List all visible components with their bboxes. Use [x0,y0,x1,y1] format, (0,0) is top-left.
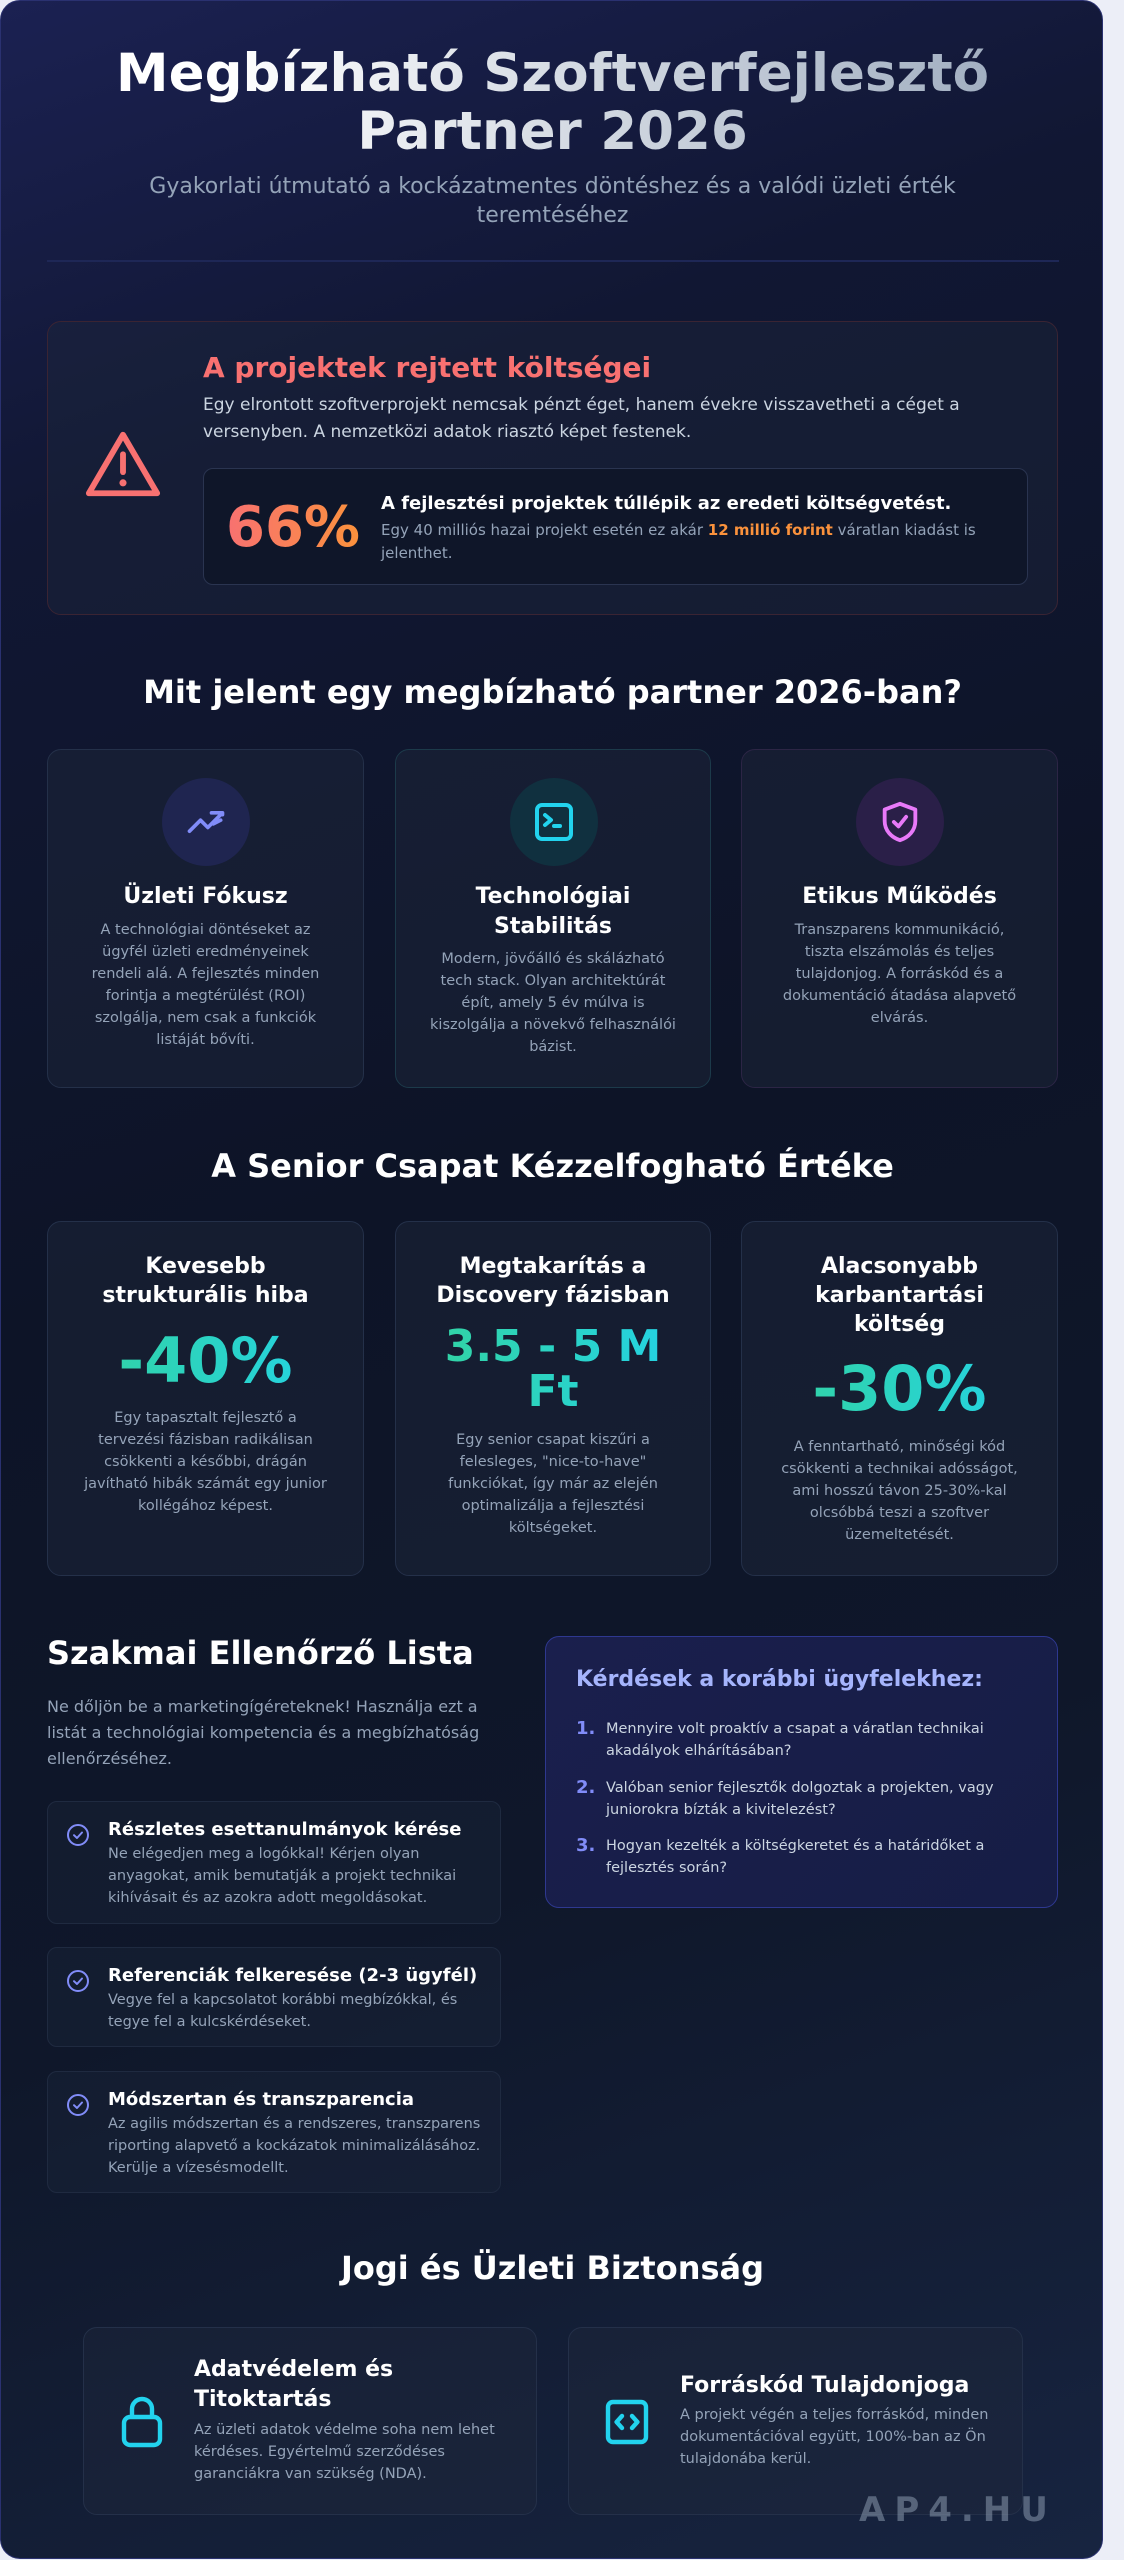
card: ethics: tulajdonjog. A forráskód és a [796,966,1003,982]
card: business focus: rendeli alá. A fejlesztés minden [92,966,319,982]
panel: questions: 1. [576,1718,595,1739]
heading: checklist: Szakmai Ellenőrző Lista [47,1634,474,1672]
stat text: jelenthet. [381,544,453,562]
stat -40% [48,1327,363,1395]
card: discovery savings [395,1221,711,1576]
card: fewer errors: strukturális hiba [102,1283,309,1308]
title: Partner 2026 [357,101,748,162]
checklist item 2 [47,1947,501,2047]
panel: questions: juniorokra bízták a kivitelezést? [606,1802,836,1818]
stat text [380,521,976,562]
stat 3.5-5M Ft [396,1324,710,1414]
card: fewer errors: Egy tapasztalt fejlesztő a [114,1410,297,1426]
stat 3.5-5M Ft: 3.5 - 5 M [445,1321,661,1372]
card: discovery savings: felesleges, "nice-to-have" [460,1454,646,1470]
checklist item 1: anyagokat, amik bemutatják a projekt technikai [108,1868,456,1884]
panel: questions [545,1636,1058,1908]
checklist item 3: riporting alapvető a kockázatok minimalizálásához. [108,2138,480,2154]
panel: questions: Kérdések a korábbi ügyfelekhez: [576,1667,983,1692]
card: ethics: dokumentáció átadása alapvető [783,988,1016,1004]
panel: questions: akadályok elhárításában? [606,1743,792,1759]
card: tech stability [395,749,711,1088]
checklist item 2: Vegye fel a kapcsolatot korábbi megbízókkal, és [108,1992,457,2008]
text: Egy elrontott szoftverprojekt nemcsak pénzt éget, hanem évekre visszavetheti a céget a [203,395,960,415]
card: maintenance: költség [854,1312,945,1337]
card: fewer errors: csökkenti a későbbi, drágán [104,1454,307,1470]
panel: questions: Mennyire volt proaktív a csapat a váratlan technikai [606,1721,984,1737]
card: tech stability: Technológiai [476,884,630,909]
checklist item 2: tegye fel a kulcskérdéseket. [108,2014,311,2030]
checklist item 1: Ne elégedjen meg a logókkal! Kérjen olyan [108,1846,420,1862]
panel: questions: fejlesztés során? [606,1860,727,1876]
icon: lock [122,2396,162,2448]
card: source code: dokumentációval együtt, 100%-ban az Ön [680,2429,986,2445]
card: discovery savings: költségeket. [509,1520,597,1536]
card: maintenance: karbantartási [815,1283,984,1308]
icon: terminal [510,778,598,866]
heading: A projektek rejtett költségei [203,351,651,384]
stat box [203,468,1028,585]
card: ethics: Etikus Működés [802,884,997,909]
panel: questions: Valóban senior fejlesztők dolgoztak a projekten, vagy [606,1780,994,1796]
text: versenyben. A nemzetközi adatok riasztó képet festenek. [203,422,691,442]
card: tech stability: kiszolgálja a növekvő felhasználói [430,1017,676,1033]
subtitle: teremtéséhez [477,203,628,228]
card: ethics [741,749,1058,1088]
card: tech stability: épít, amely 5 év múlva is [461,995,645,1011]
card: ethics: Transzparens kommunikáció, [795,922,1004,938]
card: business focus: forintja a megtérülést (ROI) [106,988,305,1004]
card: ethics: elvárás. [871,1010,928,1026]
heading: partner 2026: Mit jelent egy megbízható partner 2026-ban? [143,673,962,711]
card: fewer errors: javítható hibák számát egy junior [84,1476,327,1492]
card: discovery savings: funkciókat, így már az elején [448,1476,658,1492]
card: maintenance: ami hosszú távon 25-30%-kal [792,1483,1007,1499]
checklist item 3: Az agilis módszertan és a rendszeres, transzparens [108,2116,480,2132]
card: discovery savings: optimalizálja a fejlesztési [462,1498,644,1514]
checklist intro: listát a technológiai kompetencia és a megbízhatóság [47,1723,479,1742]
card: maintenance [741,1221,1058,1576]
card: source code [568,2327,1023,2515]
card: maintenance: olcsóbbá teszi a szoftver [810,1505,989,1521]
title: Megbízható Szoftverfejlesztő [116,43,989,104]
checklist item 1 [47,1801,501,1924]
card: tech stability: bázist. [529,1039,577,1055]
checklist intro: ellenőrzéséhez. [47,1749,172,1768]
card: fewer errors: tervezési fázisban radikálisan [98,1432,313,1448]
stat -30%: -30% [812,1352,987,1425]
card: maintenance: A fenntartható, minőségi kód [794,1439,1005,1455]
icon: shield [856,778,944,866]
card: business focus [47,749,364,1088]
checklist intro [47,1697,479,1768]
card: discovery savings: Discovery fázisban [436,1283,670,1308]
icon: warning [86,432,160,496]
card: maintenance: csökkenti a technikai adósságot, [781,1461,1018,1477]
panel: questions: 3. [576,1835,595,1856]
stat 3.5-5M Ft: Ft [527,1366,579,1417]
card: business focus: szolgálja, nem csak a funkciók [95,1010,316,1026]
card: discovery savings: Egy senior csapat kiszűri a [456,1432,650,1448]
heading: senior team value: A Senior Csapat Kézzelfogható Értéke [211,1147,894,1185]
card: data protection: Az üzleti adatok védelme soha nem lehet [194,2422,495,2438]
card: data protection [83,2327,537,2515]
checklist item 1: Részletes esettanulmányok kérése [108,1819,461,1840]
card: data protection: Titoktartás [194,2387,331,2412]
card: fewer errors: Kevesebb [145,1254,266,1279]
card: maintenance: üzemeltetését. [845,1527,954,1543]
card: business focus: ügyfél üzleti eredményeinek [102,944,309,960]
stat text: Egy 40 milliós hazai projekt esetén ez akár 12 millió forint váratlan kiadást is [381,521,976,539]
card: fewer errors: kollégához képest. [138,1498,273,1514]
card: maintenance: Alacsonyabb [821,1254,978,1279]
checklist intro: Ne dőljön be a marketingígéreteknek! Használja ezt a [47,1697,478,1716]
card: business focus: Üzleti Fókusz [123,884,288,909]
stat -40%: -40% [118,1324,293,1397]
heading: legal: Jogi és Üzleti Biztonság [341,2249,764,2287]
title [1,45,1104,161]
subtitle: Gyakorlati útmutató a kockázatmentes döntéshez és a valódi üzleti érték [149,174,956,199]
card: data protection: garanciákra van szükség (NDA). [194,2466,427,2482]
panel: hidden costs [47,321,1058,615]
icon: trend [162,778,250,866]
card: fewer errors [47,1221,364,1576]
card: tech stability: Stabilitás [494,914,612,939]
checklist item 3: Módszertan és transzparencia [108,2089,414,2110]
checklist item 2: Referenciák felkeresése (2-3 ügyfél) [108,1965,477,1986]
card: tech stability: tech stack. Olyan architektúrát [441,973,665,989]
subtitle [149,174,956,228]
card: data protection: Adatvédelem és [194,2357,393,2382]
card: data protection: kérdéses. Egyértelmű szerződéses [194,2444,445,2460]
stat number: 66% [226,495,360,560]
checklist item 3: Kerülje a vízesésmodellt. [108,2160,289,2176]
checklist item 1: kihívásait és az azokra adott megoldásokat. [108,1890,427,1906]
text [203,395,960,442]
panel: questions: Hogyan kezelték a költségkeretet és a határidőket a [606,1838,984,1854]
panel: questions: 2. [576,1777,595,1798]
stat heading: A fejlesztési projektek túllépik az eredeti költségvetést. [381,493,951,514]
card: tech stability: Modern, jövőálló és skálázható [441,951,665,967]
card: business focus: listáját bővíti. [156,1032,255,1048]
card: source code: Forráskód Tulajdonjoga [680,2373,969,2398]
icon: code [606,2400,648,2444]
card: ethics: tiszta elszámolás és teljes [805,944,994,960]
watermark: AP4.HU [859,2490,1057,2530]
card: source code: tulajdonába kerül. [680,2451,811,2467]
card: business focus: A technológiai döntéseket az [101,922,310,938]
card: source code: A projekt végén a teljes forráskód, minden [680,2407,988,2423]
card: discovery savings: Megtakarítás a [460,1254,646,1279]
checklist item 3 [47,2071,501,2193]
stat -30% [742,1355,1057,1423]
